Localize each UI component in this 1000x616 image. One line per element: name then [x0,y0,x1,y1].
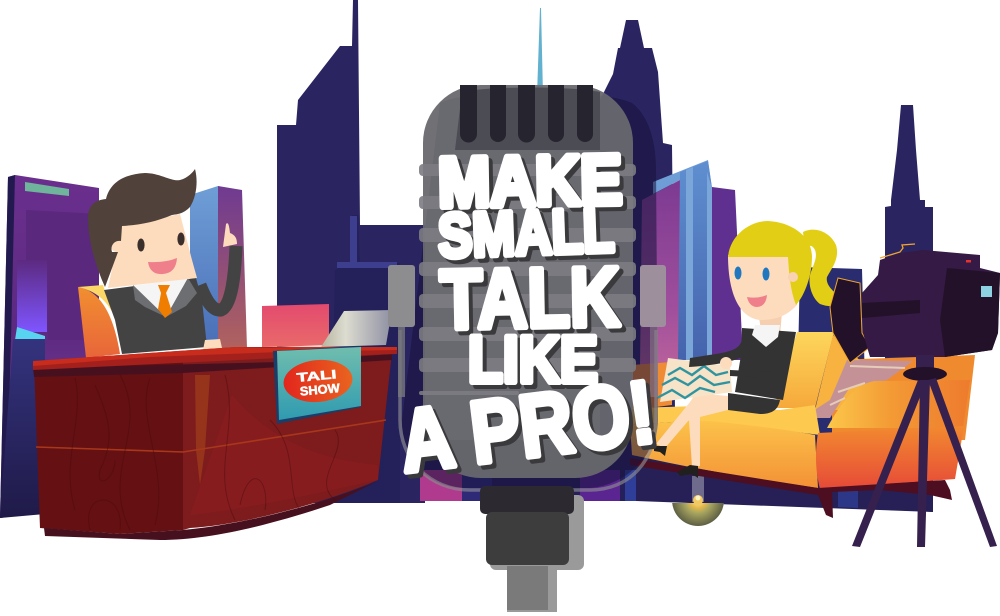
hair [88,169,197,287]
city skyline [0,0,933,526]
legs [656,393,728,467]
building: lower navy block [330,215,400,503]
eyes [137,232,185,252]
news desk [33,346,397,540]
chevron pillow [657,358,732,402]
ear [788,272,798,282]
desk top under-shadow [33,354,392,377]
raised hand [223,223,237,247]
building: navy tower right of mic [600,20,676,500]
title: LIKE [468,322,598,396]
building: tall navy centre-left [277,0,425,503]
sofa back left [632,362,672,410]
base band right [636,430,933,512]
mouth [747,295,767,307]
tie [158,285,172,318]
desk top [33,347,397,370]
seat front [630,420,818,488]
right mount [640,265,666,397]
mic stem [507,566,557,612]
raised arm [200,246,236,310]
desk shelf line [36,420,386,452]
rec light [966,260,971,262]
neck [758,312,782,335]
mic outer cradle [400,330,656,490]
backdrop pink panel [262,304,329,347]
mic grille field [455,88,600,150]
mic head [423,85,633,478]
mic dark offset [402,92,658,488]
suit body [104,278,207,354]
building: navy block right of woman [795,267,868,500]
backrest left [774,332,834,408]
camera top handle [880,244,915,258]
skirt [728,393,780,414]
mic ribs [419,164,636,395]
tv camera [830,244,1000,547]
sofa [630,332,975,518]
interviewer woman [654,221,848,478]
shoes [654,446,698,478]
camera band [862,300,920,318]
ear [111,240,123,252]
backrest right [815,335,870,410]
sofa base and legs [630,458,952,518]
camera rear [940,268,1000,357]
neck shadow [490,495,584,570]
microphone [388,85,666,612]
base band under mic [420,440,690,501]
face [108,214,197,288]
show sign [273,346,361,424]
hair [728,221,812,305]
desk body left face [34,360,183,534]
ponytail [803,230,848,306]
desk bottom edge [44,482,376,540]
tripod [852,355,997,547]
viewfinder light [981,286,992,297]
seat top [632,405,820,435]
shirt [133,278,188,317]
stage light bulb [672,474,724,526]
lapels [133,278,197,317]
mic grille slots [460,85,593,142]
hand [720,357,732,369]
logo text: TALI [296,367,337,385]
face [728,255,800,320]
building: far right spire [885,105,933,512]
desk light sheen [190,395,378,515]
mic neck [486,512,569,565]
cushion right [827,380,970,428]
camera body [862,250,1000,357]
antenna [537,8,543,95]
pillow striped [802,360,913,418]
camera hood [830,278,870,363]
laptop [280,310,392,349]
logo text: SHOW [299,381,341,399]
title [394,140,660,491]
mic neck collar [480,486,574,514]
blouse collar [752,325,780,347]
desk body right face [183,352,392,530]
building: purple and blue tower [640,160,743,365]
left mount [388,265,415,397]
chair [78,285,203,358]
arm right [816,426,964,489]
building: blue and purple behind anchor [190,186,247,348]
arm [689,340,775,378]
title: MAKE [437,140,623,222]
sofa back orange [832,355,975,440]
title: TALK [439,249,621,347]
building: left purple [0,175,99,518]
tower windows [337,216,397,268]
logo text [296,367,341,399]
title: A PRO! [394,362,660,491]
oval logo [282,357,354,405]
mouth [148,258,177,274]
eyes [734,266,770,280]
desk hand [203,339,222,350]
jacket [735,328,796,400]
anchor man [78,169,237,358]
title: SMALL [437,196,615,271]
wood grain [70,375,338,530]
